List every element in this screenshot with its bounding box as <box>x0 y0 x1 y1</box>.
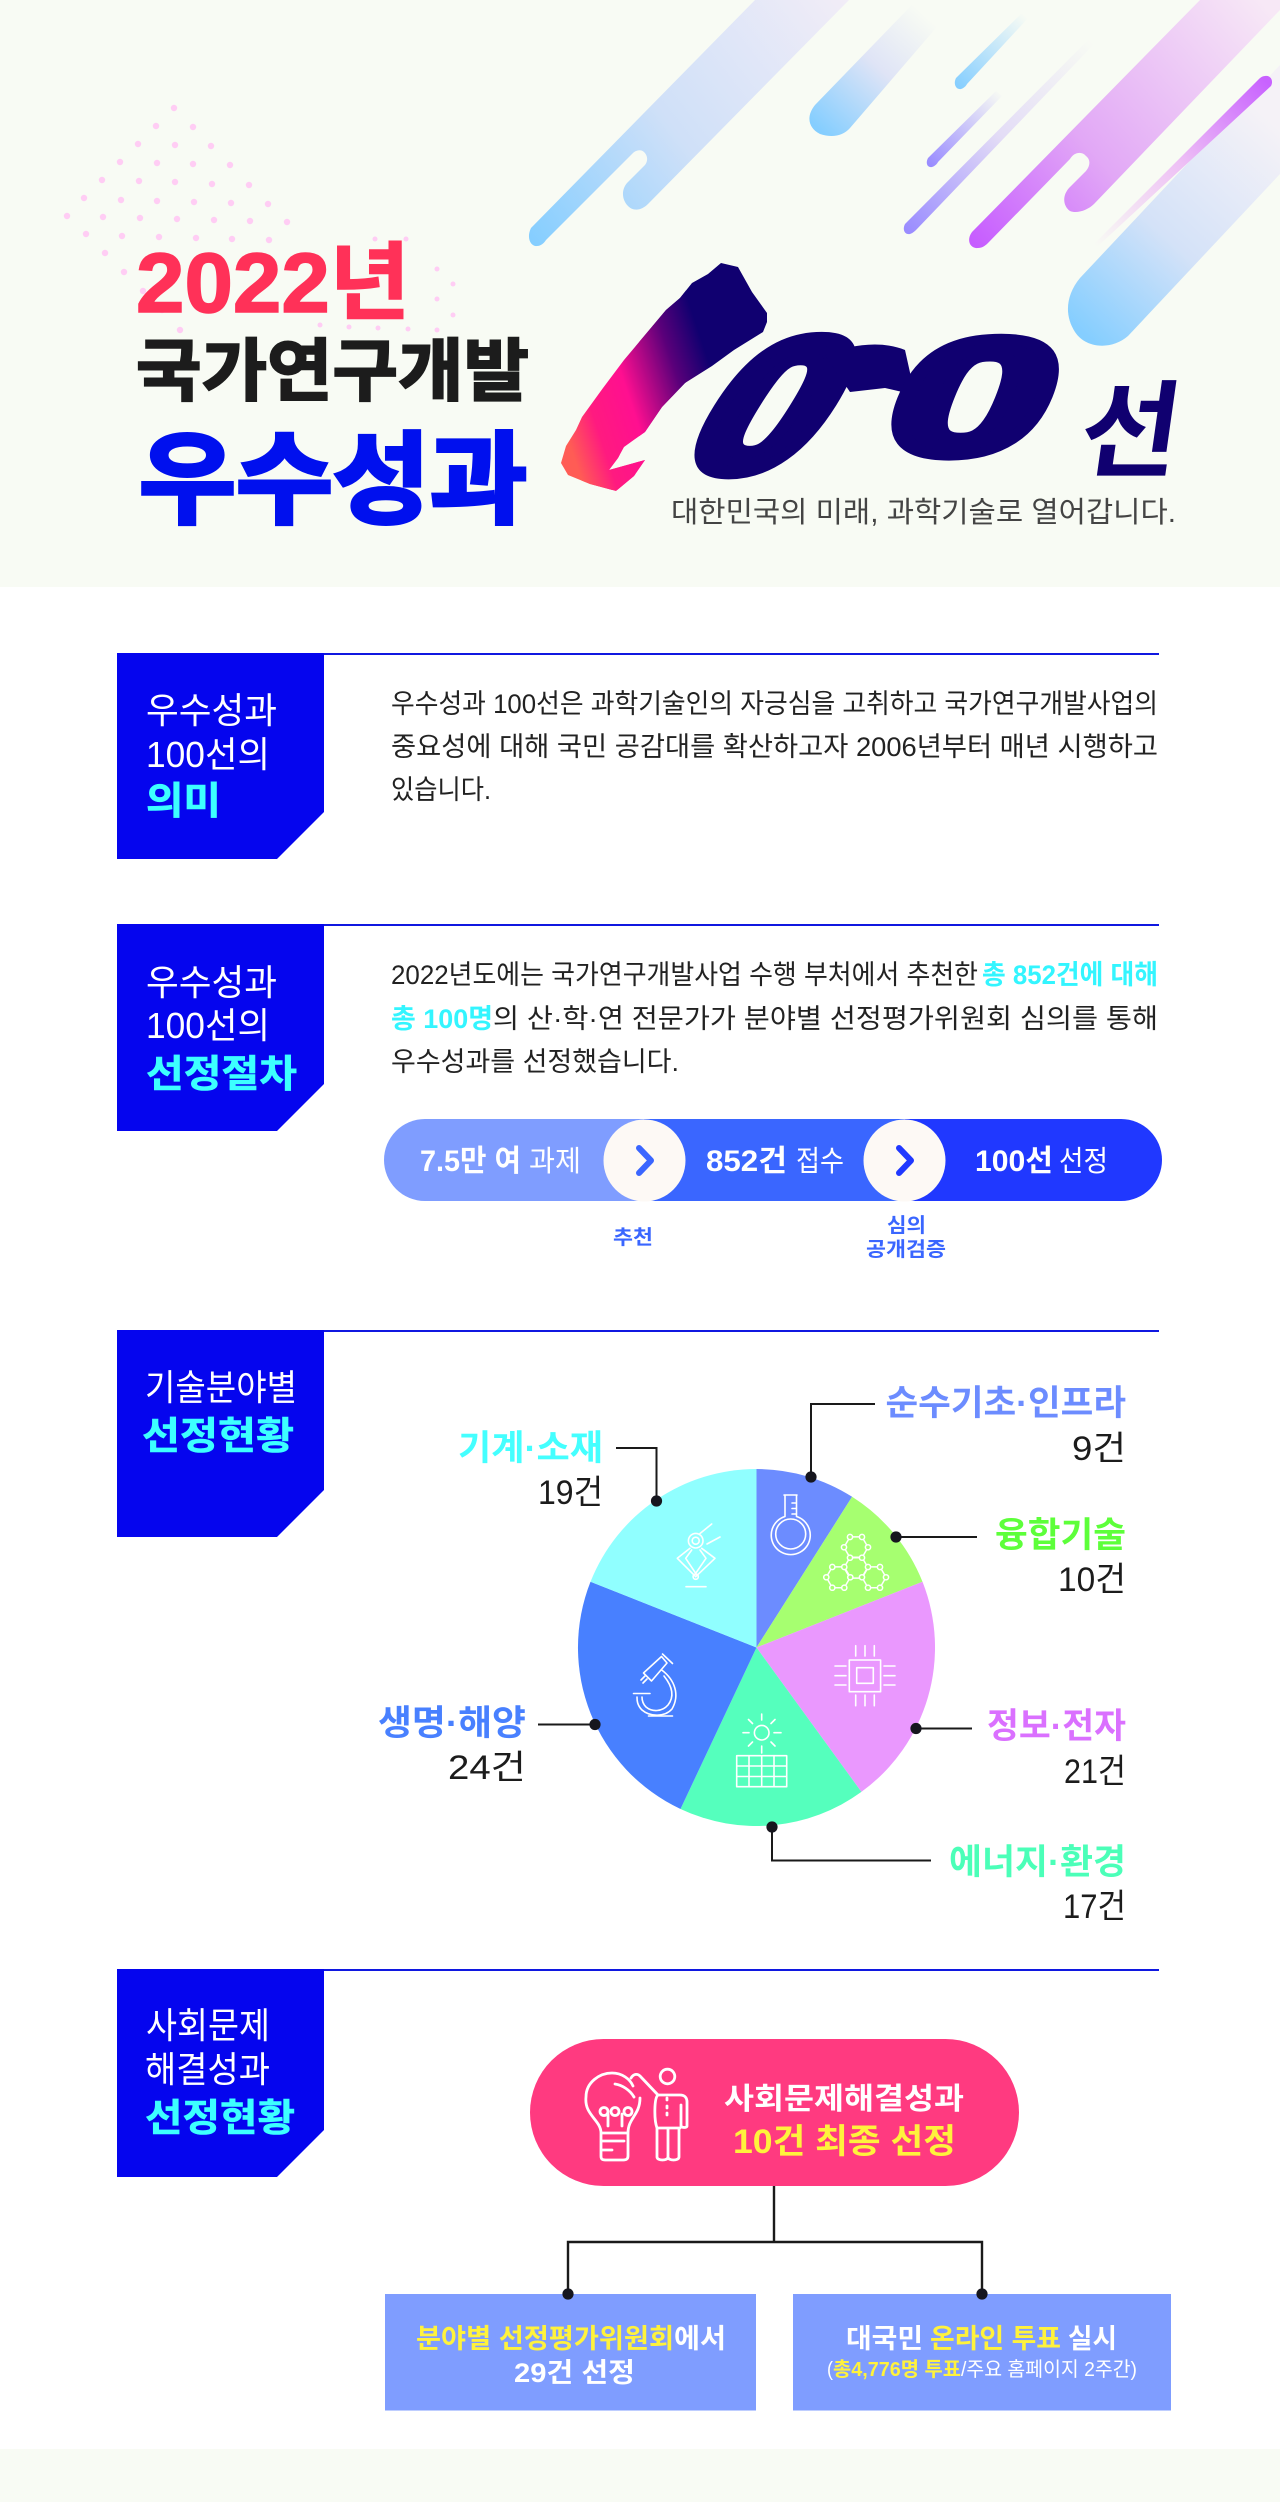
label: 기계·소재 19건 <box>458 1429 603 1512</box>
slice: 생명·해양 <box>578 1582 756 1809</box>
slice: 순수기초·인프라 <box>756 1469 852 1648</box>
pill caption: 심의 공개검증 <box>866 1214 946 1261</box>
step 2 label: 852건 <box>706 1145 787 1178</box>
text block: meaning: 우수성과 100선은 과학기술인의 자긍심을 고취하고 국가연구개발사업의 <box>391 689 1158 719</box>
title: 국가연구개발: 국가연구개발 <box>136 334 529 410</box>
text block: procedure: 총 100명 <box>391 1004 493 1034</box>
step 3 label: 선정 <box>1059 1146 1108 1178</box>
step 3 label: 100선 <box>975 1145 1053 1178</box>
streak: large pale blue <box>529 0 849 246</box>
title <box>136 236 529 537</box>
panel: 우수성과 100선의 의미 <box>117 653 324 859</box>
section 4 rule <box>117 1969 1159 1971</box>
label: 생명·해양 24건: 24건 <box>448 1749 526 1787</box>
brush logo: 100선 <box>561 263 1176 491</box>
chevron circle 2 <box>864 1120 946 1202</box>
leader: 기계·소재 <box>616 1448 662 1507</box>
icon: microscope <box>634 1654 676 1716</box>
label: 정보·전자 21건 <box>987 1707 1126 1791</box>
slice: 에너지·환경 <box>680 1648 861 1826</box>
icon: flask <box>771 1495 810 1555</box>
icon: chip <box>835 1646 895 1706</box>
section 2 rule <box>117 924 1159 926</box>
text block: meaning <box>391 689 1158 805</box>
box: 온라인 투표: ( <box>827 2359 833 2381</box>
box: 온라인 투표: 총4,776명 투표 <box>833 2358 961 2381</box>
callout: 사회문제해결성과 10건 최종 선정: 10건 최종 선정 <box>733 2123 956 2161</box>
label: 융합기술 10건 <box>995 1516 1126 1599</box>
brush digit 1: 1 <box>560 183 749 563</box>
panel: 기술분야별 선정현황 <box>117 1330 324 1537</box>
panel: 우수성과 100선의 선정절차: 선정절차 <box>146 1054 297 1096</box>
icon: molecule <box>824 1534 889 1590</box>
step 1 label <box>420 1145 581 1178</box>
text block: meaning: 중요성에 대해 국민 공감대를 확산하고자 2006년부터 매년 시행하고 <box>391 732 1158 762</box>
slice: 기계·소재 <box>590 1469 756 1648</box>
pill caption: 심의 공개검증: 공개검증 <box>866 1238 946 1261</box>
text block: procedure: 의 산·학·연 전문가가 분야별 선정평가위원회 심의를 통해 <box>493 1004 1158 1034</box>
brush digit second 0: 0 <box>858 305 1093 489</box>
streak: big blue <box>1068 65 1280 346</box>
leader: 생명·해양 <box>538 1719 601 1730</box>
panel: 사회문제 해결성과 선정현황: 사회문제 <box>146 2005 270 2046</box>
panel: 기술분야별 선정현황: 기술분야별 <box>145 1367 297 1408</box>
step 2 label <box>706 1145 844 1178</box>
streak: large violet <box>969 0 1280 248</box>
hero background <box>0 0 1280 587</box>
label: 순수기초·인프라 9건 <box>886 1384 1126 1468</box>
icon: bulb and person <box>586 2069 687 2160</box>
brush digit first 0: 0 <box>647 300 904 512</box>
label: 융합기술 10건: 10건 <box>1058 1561 1126 1599</box>
panel: 사회문제 해결성과 선정현황: 해결성과 <box>145 2049 270 2090</box>
label: 정보·전자 21건: 정보·전자 <box>987 1707 1126 1746</box>
panel: 사회문제 해결성과 선정현황 <box>117 1969 324 2177</box>
leader: 정보·전자 <box>910 1723 972 1734</box>
icon: solar panel <box>737 1714 787 1787</box>
box: 선정평가위원회: 29건 선정 <box>514 2358 635 2388</box>
title: 2022년: 2022년 <box>136 236 410 330</box>
label: 융합기술 10건: 융합기술 <box>995 1516 1126 1555</box>
process pill <box>384 1119 1162 1202</box>
label: 기계·소재 19건: 19건 <box>538 1474 603 1512</box>
streak: thin light blue <box>955 11 1030 89</box>
panel: 사회문제 해결성과 선정현황: 선정현황 <box>145 2098 295 2140</box>
footer band <box>0 2449 1280 2502</box>
panel: 우수성과 100선의 의미: 의미 <box>146 781 221 823</box>
step 3 label <box>975 1145 1108 1178</box>
pill caption: 추천: 추천 <box>613 1226 653 1249</box>
box: 온라인 투표: /주요 홈페이지 2주간) <box>961 2358 1137 2381</box>
text block: procedure: 우수성과를 선정했습니다. <box>391 1047 679 1077</box>
callout: 사회문제해결성과 10건 최종 선정 <box>530 2039 1019 2186</box>
label: 생명·해양 24건 <box>378 1704 526 1787</box>
connector end dots <box>562 2288 988 2300</box>
connector tree <box>568 2186 982 2294</box>
box: 온라인 투표: 온라인 투표 <box>930 2324 1061 2354</box>
streak: blue blob <box>809 0 960 136</box>
step 1 label: 7.5만 여 <box>420 1145 521 1178</box>
step 2 label: 접수 <box>796 1146 844 1178</box>
text block: procedure <box>391 960 1158 1077</box>
streak: thin purple long <box>904 38 1096 234</box>
text block: procedure: 총 852건에 대해 <box>982 960 1158 990</box>
brush syllable 선: 선 <box>1073 373 1189 491</box>
leader: 에너지·환경 <box>766 1821 931 1860</box>
label: 기계·소재 19건: 기계·소재 <box>458 1429 603 1468</box>
brush connector <box>825 345 915 395</box>
text block: procedure: 2022년도에는 국가연구개발사업 수행 부처에서 추천한 <box>391 960 978 990</box>
box: 선정평가위원회: 에서 <box>674 2324 726 2354</box>
label: 순수기초·인프라 9건: 순수기초·인프라 <box>886 1384 1126 1423</box>
pie chart <box>578 1469 935 1826</box>
icon: robot arm <box>677 1524 720 1587</box>
panel: 기술분야별 선정현황: 선정현황 <box>142 1416 294 1458</box>
slice: 융합기술 <box>756 1497 922 1648</box>
callout: 사회문제해결성과 10건 최종 선정: 사회문제해결성과 <box>724 2083 964 2116</box>
label: 순수기초·인프라 9건: 9건 <box>1072 1430 1126 1468</box>
tagline: 대한민국의 미래, 과학기술로 열어갑니다. <box>671 496 1176 529</box>
label: 생명·해양 24건: 생명·해양 <box>378 1704 526 1743</box>
streak: thin purple short <box>927 91 1002 167</box>
label: 정보·전자 21건: 21건 <box>1064 1753 1126 1791</box>
text block: meaning: 있습니다. <box>391 775 491 805</box>
box: 온라인 투표: 대국민 <box>846 2324 923 2354</box>
box: 선정평가위원회 <box>385 2294 756 2410</box>
panel: 우수성과 100선의 선정절차 <box>117 924 324 1131</box>
section 1 rule <box>117 653 1159 655</box>
panel: 우수성과 100선의 의미: 우수성과 <box>146 690 277 731</box>
box: 온라인 투표 <box>793 2294 1171 2410</box>
pill caption: 심의 공개검증: 심의 <box>887 1214 926 1237</box>
leader: 순수기초·인프라 <box>805 1404 875 1483</box>
section 3 rule <box>117 1330 1159 1332</box>
label: 에너지·환경 17건 <box>949 1843 1126 1926</box>
label: 에너지·환경 17건: 17건 <box>1063 1888 1126 1926</box>
step 1 label: 과제 <box>529 1146 581 1178</box>
label: 에너지·환경 17건: 에너지·환경 <box>949 1843 1126 1882</box>
streak: vivid violet thin <box>1092 76 1272 246</box>
box: 선정평가위원회: 분야별 선정평가위원회 <box>416 2324 674 2354</box>
panel: 우수성과 100선의 선정절차: 100선의 <box>146 1005 270 1046</box>
leader: 융합기술 <box>890 1531 977 1543</box>
panel: 우수성과 100선의 선정절차: 우수성과 <box>146 962 277 1003</box>
box: 온라인 투표: 실시 <box>1068 2324 1117 2354</box>
pink dot pattern <box>64 105 456 376</box>
title: 우수성과: 우수성과 <box>139 425 527 537</box>
panel: 우수성과 100선의 의미: 100선의 <box>146 734 270 775</box>
slice: 정보·전자 <box>756 1582 935 1792</box>
chevron circle 1 <box>604 1120 686 1202</box>
